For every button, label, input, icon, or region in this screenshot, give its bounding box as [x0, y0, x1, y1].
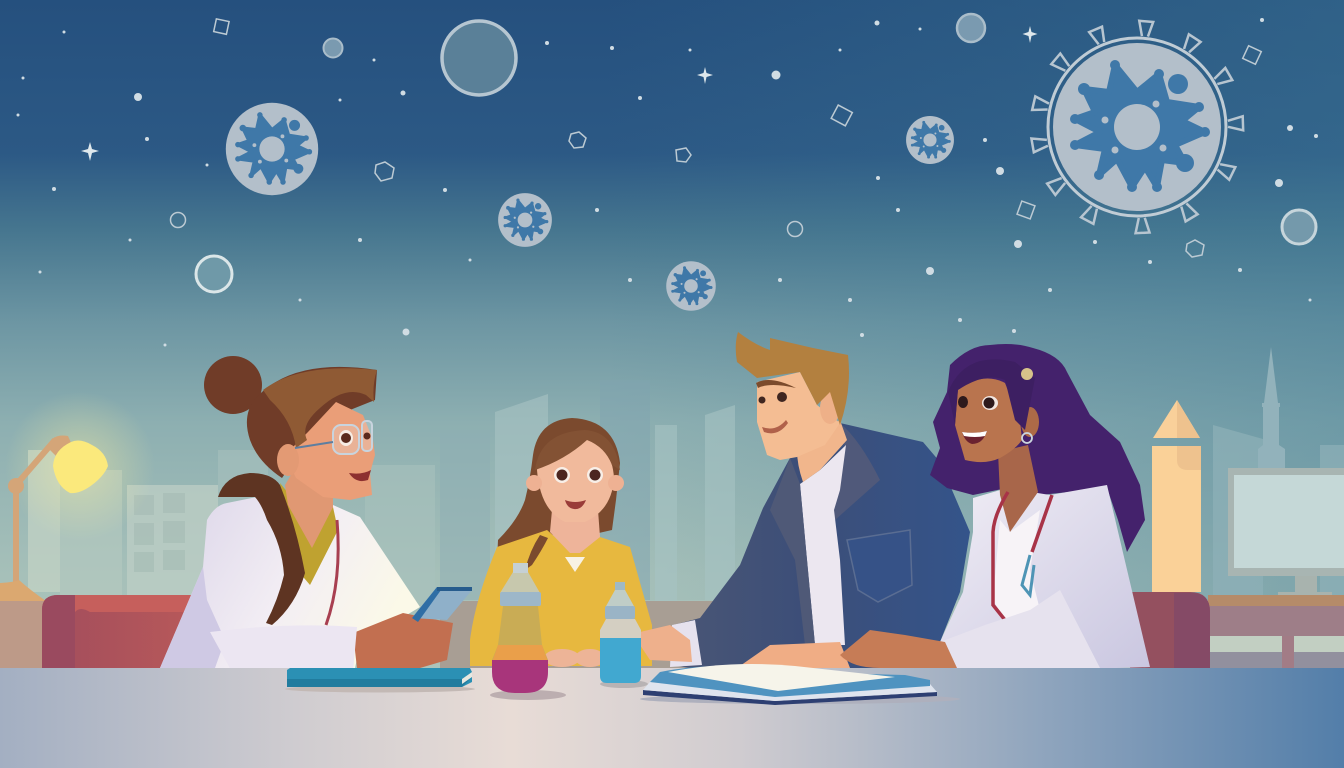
- closed notebook: [285, 668, 475, 692]
- sweater hair strand: [525, 535, 548, 570]
- hands: [544, 649, 605, 667]
- sofa right: [1130, 592, 1210, 668]
- jacket collar: [825, 423, 880, 530]
- hair bun: [204, 356, 262, 414]
- lab coat: [160, 497, 420, 675]
- microbe icons: [226, 103, 954, 311]
- cuff: [670, 620, 702, 667]
- inner shirt: [993, 510, 1040, 620]
- lamp: [0, 391, 155, 601]
- star dots: [16, 18, 1318, 346]
- fringe: [535, 430, 620, 470]
- neck: [550, 510, 600, 553]
- sleeve cuff: [210, 625, 357, 672]
- hair back: [497, 418, 620, 562]
- tan tower: [1152, 400, 1201, 592]
- back hair: [247, 367, 377, 478]
- flask: amber and magenta: [490, 563, 566, 700]
- hair: [930, 344, 1145, 552]
- braid: [218, 473, 305, 625]
- spire tower: [1258, 347, 1285, 479]
- earring: [1022, 433, 1032, 443]
- table: [0, 668, 1344, 768]
- hand middle: [737, 642, 850, 668]
- hand and forearm: [840, 630, 957, 668]
- stethoscope tube: [1022, 555, 1034, 595]
- hair: [736, 332, 849, 425]
- bubbles: [196, 14, 1316, 292]
- monitor: [1228, 468, 1344, 596]
- fringe: [948, 359, 1035, 430]
- neck: [998, 445, 1038, 532]
- ears: [526, 475, 624, 491]
- shirt: [280, 483, 338, 585]
- jacket pocket: [847, 530, 912, 602]
- person: woman with bun in lab coat: [160, 356, 472, 675]
- ear: [820, 392, 840, 424]
- person: girl in yellow: [470, 418, 652, 667]
- face: [285, 402, 375, 500]
- stethoscope: [326, 520, 338, 625]
- large microbe: [1031, 21, 1243, 233]
- open book: [640, 664, 960, 705]
- hair clip: [1021, 368, 1033, 380]
- back wall band: [440, 601, 740, 668]
- left cabinet: [0, 601, 44, 668]
- stethoscope: [993, 492, 1052, 620]
- desk right: [1208, 595, 1344, 668]
- hand left: [640, 625, 692, 662]
- sofa left: [42, 595, 200, 668]
- face: [955, 379, 1022, 462]
- eyes: [958, 396, 998, 410]
- eyebrow: [756, 380, 796, 388]
- eyes: [339, 430, 370, 446]
- ear: [277, 444, 299, 476]
- person: woman with purple hair: [840, 344, 1150, 673]
- mouth: [349, 470, 371, 481]
- fringe highlight: [263, 368, 377, 448]
- jacket: [672, 423, 970, 668]
- forearm: [353, 613, 453, 668]
- sleeve: [940, 590, 1100, 673]
- collar tip: [565, 557, 585, 572]
- face: [757, 372, 840, 460]
- coat: [940, 485, 1150, 673]
- outlined small shapes: [170, 19, 1261, 257]
- mouth: [962, 431, 987, 444]
- tee: [800, 445, 846, 645]
- ear: [1021, 407, 1039, 437]
- background city skyline: [28, 380, 1344, 605]
- neck: [797, 420, 847, 482]
- sweater: [470, 530, 652, 666]
- glasses: [295, 421, 372, 454]
- sparkles: [81, 26, 1038, 161]
- eyes: [554, 467, 603, 483]
- neck: [285, 460, 333, 548]
- tablet book: [412, 587, 472, 622]
- face: [537, 438, 614, 522]
- mouth: [565, 500, 586, 509]
- bottle: blue: [600, 582, 648, 688]
- lapel: [770, 458, 815, 645]
- mouth: [762, 420, 788, 433]
- person: man in navy jacket: [640, 332, 970, 668]
- coat shadow: [160, 567, 225, 668]
- eyes: [758, 392, 787, 404]
